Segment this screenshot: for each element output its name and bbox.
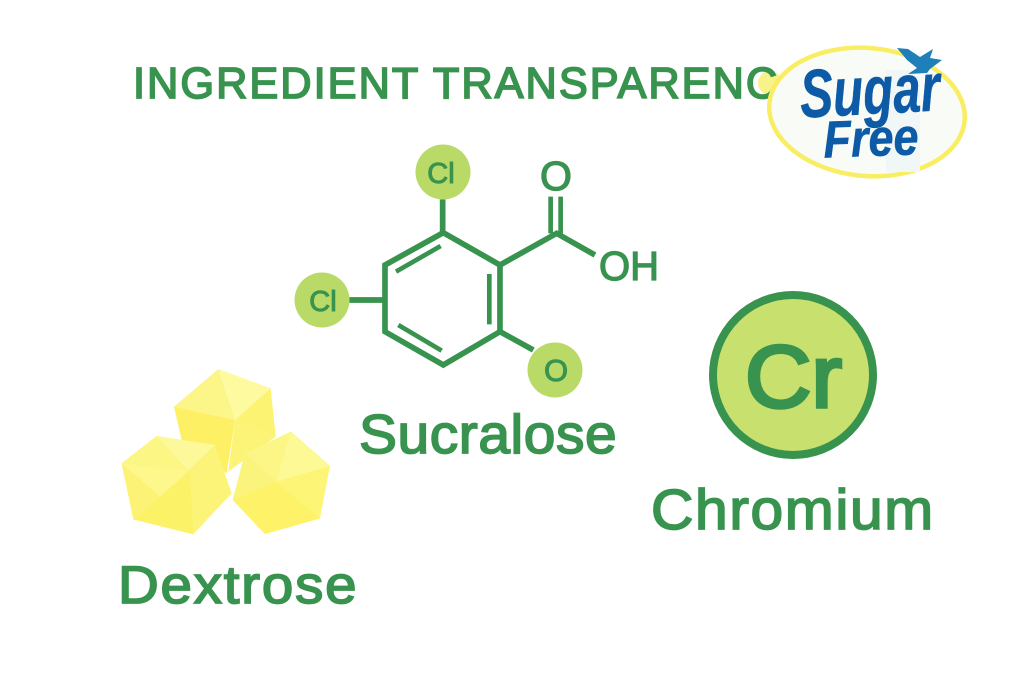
- logo sheen: [886, 70, 920, 172]
- crystal: left: [122, 436, 232, 534]
- logo: Sugar Free: [764, 40, 970, 184]
- sucralose molecule: [294, 144, 659, 398]
- atom: Cl left: Cl: [309, 286, 337, 318]
- dextrose crystals: [122, 369, 330, 534]
- atom: O bottom: O: [544, 353, 568, 388]
- label: Dextrose: Dextrose: [118, 555, 357, 615]
- atom: O bottom: [528, 342, 582, 398]
- molecule bonds: [349, 197, 595, 365]
- chromium badge: [713, 295, 873, 455]
- atom: Cl left: [294, 272, 350, 328]
- atom: O top: O: [540, 153, 572, 199]
- title: INGREDIENT TRANSPARENC: [133, 59, 777, 108]
- yellow glow inside title letter: [758, 71, 782, 95]
- logo word: Sugar: Sugar: [798, 49, 944, 133]
- label: Sucralose: Sucralose: [359, 403, 617, 465]
- logo oval: [764, 40, 970, 184]
- atom: Cl top: [416, 144, 470, 200]
- logo bird: [897, 48, 942, 74]
- label: Chromium: Chromium: [651, 479, 933, 542]
- chromium badge: Cr: [745, 327, 842, 426]
- atom: Cl top: Cl: [427, 158, 455, 190]
- crystal: right: [233, 432, 330, 534]
- crystal: back: [174, 369, 276, 473]
- logo word: Free: Free: [822, 108, 919, 170]
- atom: OH: OH: [599, 243, 659, 289]
